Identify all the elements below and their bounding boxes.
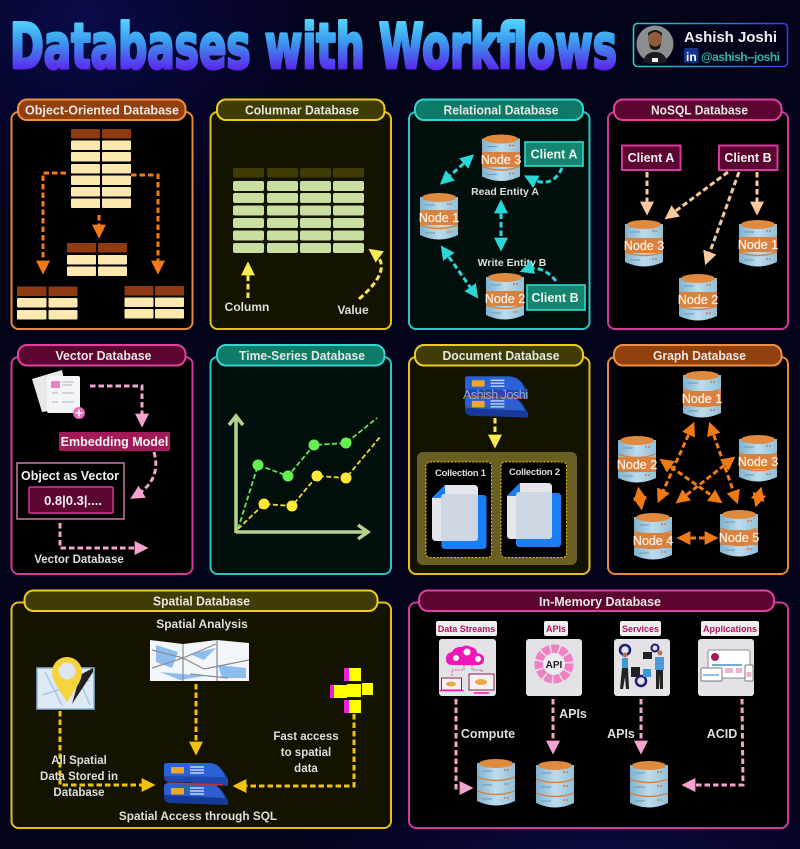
collections container [417, 452, 577, 565]
heading: object-oriented database: Object-Oriented Database [25, 104, 179, 118]
table: left object [17, 286, 78, 320]
heading: nosql database: NoSQL Database [651, 104, 748, 118]
heading: columnar database [217, 100, 384, 120]
chip: apis: APIs [546, 624, 566, 634]
chip: applications: Applications [703, 624, 757, 634]
database 1 [477, 759, 515, 806]
collection 1 [426, 462, 492, 558]
label: all spatial data: Data Stored in [40, 771, 118, 783]
author name: Ashish Joshi [684, 29, 777, 46]
arrow: analysis to server [194, 684, 198, 750]
panel: object-oriented database [12, 100, 192, 329]
arrow: services to database [640, 699, 642, 749]
arrow: model to vector [135, 452, 156, 496]
node 2 [485, 273, 525, 320]
icon: folded map [150, 640, 249, 681]
label: column: Column [225, 300, 269, 314]
node 2 [617, 436, 657, 482]
arrow: cubes to server [238, 714, 354, 786]
label: fast access: data [294, 763, 318, 775]
heading: spatial database: Spatial Database [153, 594, 250, 608]
series: green line [238, 418, 377, 529]
icon: yellow spatial cubes [330, 668, 373, 713]
heading: time-series database [217, 345, 384, 366]
arrow: value [359, 252, 381, 299]
card: data streams [439, 639, 496, 696]
chart axes [229, 416, 368, 539]
linkedin icon [684, 48, 698, 64]
node 3 [481, 134, 521, 181]
node 1 [738, 220, 778, 266]
node 3 [624, 220, 664, 266]
label: spatial access through sql: Spatial Access through SQL [119, 809, 277, 823]
node 3: Node 3 [481, 153, 521, 167]
card: api gear [526, 639, 582, 696]
node 5: Node 5 [719, 531, 759, 545]
object as vector [17, 463, 124, 519]
node 1: Node 1 [682, 392, 722, 406]
heading: in-memory database: In-Memory Database [539, 595, 661, 609]
heading: in-memory database [419, 590, 774, 611]
client b: Client B [724, 151, 772, 165]
collection 2 [501, 462, 566, 558]
label: fast access: Fast access [273, 731, 339, 743]
label: apis: APIs [559, 707, 587, 721]
panel: columnar database [210, 100, 391, 329]
node 1 [419, 193, 459, 240]
node 2: Node 2 [678, 293, 718, 307]
card: services team [614, 639, 670, 696]
node 2 [678, 274, 718, 320]
arrows: object inheritance [43, 173, 158, 269]
label: vector database: Vector Database [34, 554, 124, 566]
arrow: column [246, 267, 250, 298]
panel: in-memory database [409, 590, 788, 828]
arrow: vector to database [60, 523, 143, 548]
heading: vector database [18, 345, 186, 366]
label: spatial analysis: Spatial Analysis [156, 617, 248, 631]
panel: vector database [12, 345, 192, 574]
panel: nosql database [608, 100, 788, 329]
chip: services [620, 621, 661, 636]
card: applications devices [698, 639, 754, 696]
table: main object [71, 129, 131, 208]
embedding model: Embedding Model [61, 435, 168, 449]
heading: graph database [614, 345, 782, 366]
node 2: Node 2 [617, 458, 657, 472]
label: acid: ACID [707, 727, 737, 741]
chip: data streams: Data Streams [438, 624, 495, 634]
arrow: documents to model [90, 386, 142, 422]
label: compute: Compute [461, 727, 515, 741]
arrow: data streams to database [456, 699, 468, 788]
database 2 [536, 761, 574, 808]
arrow: server to collections [494, 418, 496, 443]
object as vector: 0.8|0.3|.... [44, 493, 102, 508]
chip: data streams [436, 621, 497, 636]
panel: spatial database [12, 590, 391, 828]
label: all spatial data: Database [53, 787, 105, 799]
node 4 [633, 513, 673, 560]
node 2: Node 2 [485, 292, 525, 306]
table: columns and values [233, 168, 364, 253]
client b [719, 146, 778, 170]
chip: apis [544, 621, 568, 636]
label: fast access: to spatial [281, 747, 331, 759]
heading: columnar database: Columnar Database [245, 104, 359, 118]
node 1: Node 1 [738, 238, 778, 252]
heading: vector database: Vector Database [56, 349, 152, 363]
icon: server [164, 763, 228, 805]
panel: relational database [409, 100, 590, 329]
client a [622, 146, 680, 170]
arrow: map to server [60, 711, 150, 785]
table: middle object [67, 243, 127, 276]
heading: object-oriented database [18, 100, 186, 120]
arrows: replication and client flows [444, 158, 562, 294]
linkedin handle: @ashish--joshi [701, 50, 780, 64]
label: value: Value [337, 303, 369, 317]
node 3: Node 3 [738, 455, 778, 469]
heading: nosql database [614, 100, 782, 120]
heading: spatial database [24, 590, 378, 611]
client a [525, 142, 583, 166]
heading: document database: Document Database [442, 349, 560, 363]
arrow: applications to database [687, 699, 743, 785]
heading: relational database: Relational Database [444, 104, 559, 118]
icon: documents [32, 370, 85, 419]
icon: server [463, 376, 528, 418]
label: apis: APIs [607, 727, 635, 741]
node 4: Node 4 [633, 534, 673, 548]
heading: graph database: Graph Database [653, 349, 746, 363]
node 1 [682, 371, 722, 418]
collection 1: Collection 1 [435, 468, 487, 479]
panel: graph database [608, 345, 788, 574]
heading: document database [415, 345, 583, 366]
icon: server: Ashish Joshi [463, 388, 528, 402]
series: yellow line [238, 437, 380, 529]
card: api gear: API [546, 660, 563, 671]
client a: Client A [531, 148, 577, 162]
client a: Client A [628, 151, 674, 165]
node 3 [738, 435, 778, 482]
label: write entity b: Write Entity B [478, 257, 547, 269]
collection 2: Collection 2 [509, 467, 560, 478]
object as vector: Object as Vector [21, 469, 119, 483]
node 5 [719, 510, 759, 556]
label: all spatial data [40, 755, 118, 799]
node 1: Node 1 [419, 211, 459, 225]
panel: time-series database [210, 345, 391, 574]
table: right object [124, 286, 184, 318]
icon: location pin on map [37, 657, 94, 709]
heading: time-series database: Time-Series Database [239, 349, 365, 363]
panel: document database [409, 345, 590, 574]
chip: services: Services [622, 624, 659, 634]
author photo [636, 26, 674, 64]
chip: applications [701, 621, 759, 636]
node 3: Node 3 [624, 239, 664, 253]
arrow: apis to database [552, 699, 554, 749]
label: fast access [273, 731, 339, 775]
heading: relational database [415, 100, 583, 120]
arrows: graph edges [639, 427, 760, 538]
linkedin icon: in [686, 50, 697, 64]
label: read entity a: Read Entity A [471, 186, 539, 198]
client b [527, 285, 585, 310]
arrows: client requests [647, 172, 757, 260]
author badge [634, 24, 788, 66]
label: all spatial data: All Spatial [51, 755, 107, 767]
database 3 [630, 761, 668, 808]
client b: Client B [531, 291, 579, 305]
